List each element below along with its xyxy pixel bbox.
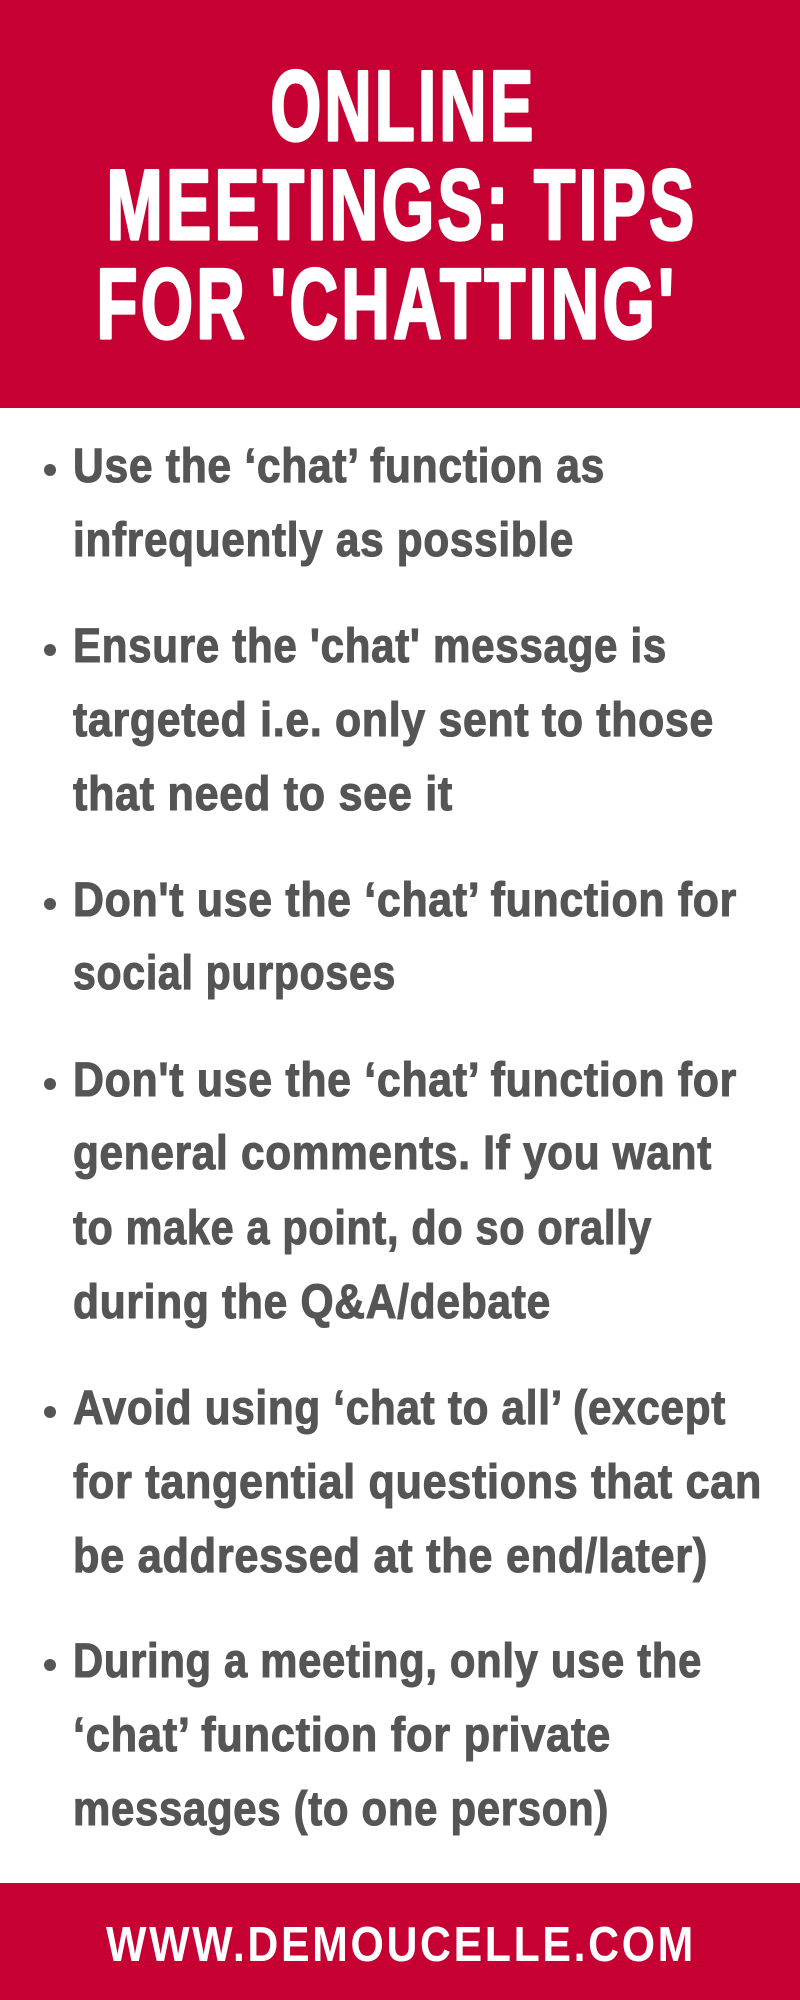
tip 4: to make a point, do so orally <box>73 1202 652 1255</box>
tip 1 <box>44 440 605 567</box>
tip 3 <box>44 874 737 1000</box>
tip 2 <box>44 620 714 821</box>
tip 5: be addressed at the end/later) <box>73 1530 708 1583</box>
tip 4: Don't use the ‘chat’ function for <box>73 1054 737 1107</box>
tip 4: general comments. If you want <box>73 1127 712 1180</box>
tip 4 <box>44 1054 737 1329</box>
tip 6: messages (to one person) <box>73 1783 609 1836</box>
footer banner <box>0 1883 800 2000</box>
tip 5 <box>44 1382 762 1583</box>
tip 5: Avoid using ‘chat to all’ (except <box>73 1382 726 1435</box>
tip 3: social purposes <box>73 947 396 1000</box>
website address: WWW.DEMOUCELLE.COM <box>106 1918 696 1972</box>
tip 6 <box>44 1635 702 1836</box>
tip 2: that need to see it <box>73 768 453 821</box>
tip 1: infrequently as possible <box>73 514 574 567</box>
tip 2: Ensure the 'chat' message is <box>73 620 667 673</box>
tip 1: Use the ‘chat’ function as <box>73 440 605 493</box>
tip 6: ‘chat’ function for private <box>73 1709 611 1762</box>
tip 4: during the Q&A/debate <box>73 1276 551 1329</box>
header banner <box>0 0 800 408</box>
tip 2: targeted i.e. only sent to those <box>73 694 714 747</box>
tip 3: Don't use the ‘chat’ function for <box>73 874 737 927</box>
title: ONLINE <box>270 50 536 161</box>
title <box>96 50 698 359</box>
tip 6: During a meeting, only use the <box>73 1635 702 1688</box>
